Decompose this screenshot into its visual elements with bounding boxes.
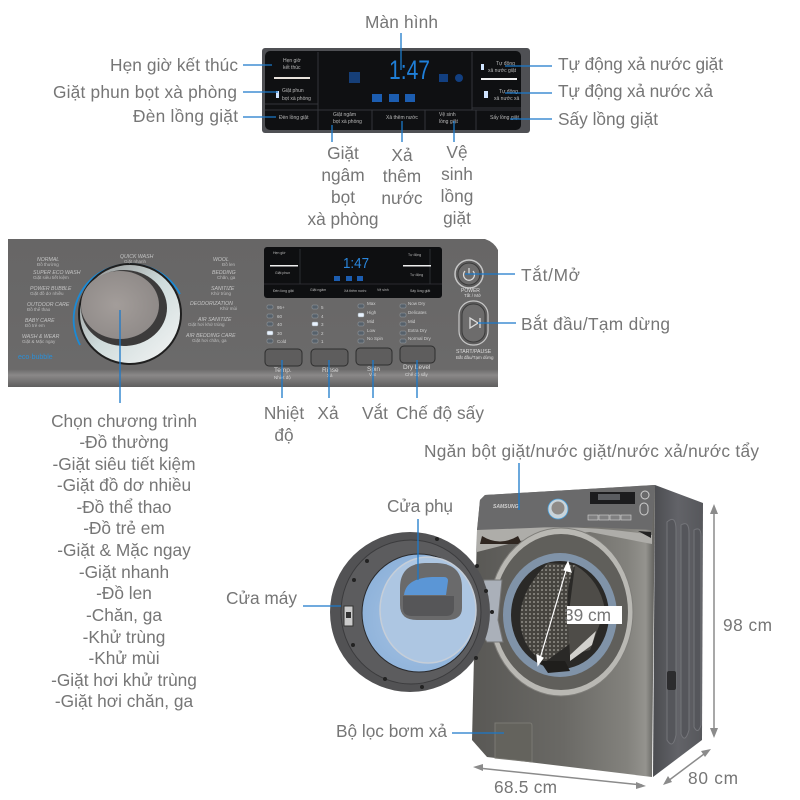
callout: auto detergent: Tự động xả nước giặt bbox=[558, 54, 723, 74]
callout: program list: Chọn chương trình bbox=[51, 411, 197, 431]
text: program names: Giặt & Mặc ngay bbox=[22, 339, 56, 344]
indicators: setting lists: 95+ bbox=[277, 305, 285, 310]
text: program names: BEDDING bbox=[212, 270, 236, 276]
indicators: setting lists bbox=[267, 301, 432, 344]
hinge bbox=[481, 580, 503, 642]
callout: drum clean: lồng bbox=[441, 186, 473, 206]
text: button labels bbox=[274, 364, 431, 380]
text: program names: AIR SANITIZE bbox=[197, 317, 232, 323]
callout: machine door bbox=[226, 588, 341, 608]
callout: screen bbox=[365, 12, 438, 70]
text: panel button labels: lồng giặt bbox=[439, 119, 459, 125]
door bbox=[330, 532, 494, 692]
panel: mini display: Giặt phun bbox=[275, 271, 290, 275]
callout: program list: -Đồ trẻ em bbox=[83, 518, 165, 538]
indicators: setting lists: 60 bbox=[277, 314, 283, 319]
door opening and drum bbox=[489, 528, 633, 696]
dial: program selector bbox=[74, 263, 182, 365]
indicators: setting lists: Normal Dry bbox=[408, 336, 432, 341]
text: button labels: Nhiệt độ bbox=[274, 375, 291, 380]
callout: temperature: Nhiệt bbox=[264, 403, 304, 423]
panel: mini display: Vệ sinh bbox=[377, 288, 389, 292]
text: program names: Khử trùng bbox=[211, 290, 232, 296]
text: program names bbox=[22, 254, 237, 344]
text: panel button labels: Tự động bbox=[496, 61, 515, 67]
text: program names: Đồ trẻ em bbox=[25, 323, 45, 328]
machine front bbox=[472, 485, 655, 777]
callout: temperature: độ bbox=[274, 425, 294, 445]
panel: mini display: Tự động bbox=[408, 253, 421, 257]
panel: middle control strip bbox=[8, 239, 498, 387]
indicators: setting lists: High bbox=[367, 310, 377, 315]
callout: foam soak bbox=[307, 125, 379, 229]
label: 98 cm: 98 cm bbox=[723, 615, 772, 635]
control panel top bbox=[477, 485, 655, 552]
button: start pause: Bắt đầu/Tạm dừng bbox=[456, 354, 494, 360]
text: program names: DEODORIZATION bbox=[190, 301, 233, 307]
callout: dispenser: Ngăn bột giặt/nước giặt/nước xả/nước tẩy bbox=[424, 441, 759, 461]
text: program names: WASH & WEAR bbox=[22, 334, 60, 340]
indicators: setting lists: 2 bbox=[321, 331, 324, 336]
callout: program list: -Đồ thể thao bbox=[76, 497, 172, 517]
callout: foam soak: bọt bbox=[331, 187, 355, 207]
text: program names: WOOL bbox=[213, 257, 229, 263]
callout: program list: -Giặt hơi chăn, ga bbox=[55, 691, 193, 711]
dimension: height bbox=[710, 504, 718, 738]
callout: program list: -Giặt & Mặc ngay bbox=[57, 540, 191, 560]
callout: foam soak: ngâm bbox=[321, 165, 365, 185]
callout: rinse bbox=[317, 360, 339, 423]
control panel top: SAMSUNG bbox=[493, 504, 519, 510]
callout: extra rinse: thêm bbox=[383, 166, 421, 186]
icons: display indicators bbox=[276, 64, 488, 102]
text: button labels: Temp. bbox=[274, 367, 292, 374]
text: program names: AIR BEDDING CARE bbox=[185, 333, 236, 339]
panel: mini display: Sấy lồng giặt bbox=[410, 289, 430, 293]
door handle bbox=[400, 563, 462, 620]
text: panel button labels: Đèn lồng giặt bbox=[279, 115, 309, 121]
indicators: setting lists: 4 bbox=[321, 314, 324, 319]
panel: mini display: Đèn lồng giặt bbox=[273, 289, 294, 293]
display: digital time: 1:47 bbox=[389, 55, 430, 85]
indicators: setting lists: Cold bbox=[277, 339, 287, 344]
label: 68.5 cm: 68.5 cm bbox=[494, 777, 557, 797]
text: button labels: Xả bbox=[327, 373, 333, 378]
callout: extra rinse: Xả bbox=[391, 145, 413, 165]
indicators: setting lists: 5 bbox=[321, 305, 324, 310]
text: program names: Đồ len bbox=[222, 262, 236, 267]
indicators: setting lists: Low bbox=[367, 328, 376, 333]
text: panel button labels bbox=[279, 58, 520, 125]
text: panel button labels: Giặt ngâm bbox=[333, 112, 356, 118]
button: start pause bbox=[456, 301, 494, 360]
callout: temperature bbox=[264, 360, 304, 445]
callout: pump filter: Bộ lọc bơm xả bbox=[336, 721, 447, 741]
text: program names: Chăn, ga bbox=[217, 275, 236, 280]
callout: rinse: Xả bbox=[317, 403, 339, 423]
text: program names: QUICK WASH bbox=[120, 254, 154, 260]
machine side panel bbox=[653, 485, 703, 777]
buttons: temp, rinse, spin, dry level bbox=[265, 346, 435, 366]
text: button labels: Spin bbox=[367, 366, 380, 373]
button: start pause: START/PAUSE bbox=[456, 349, 492, 355]
callout: drum clean: giặt bbox=[443, 208, 471, 228]
callout: program list: -Chăn, ga bbox=[86, 605, 162, 625]
callout: dry mode: Chế độ sấy bbox=[396, 403, 484, 423]
text: program names: Giặt đồ dơ nhiều bbox=[30, 291, 64, 296]
callout: drum clean bbox=[441, 121, 473, 228]
text: button labels: Chế độ sấy bbox=[405, 372, 429, 377]
indicators: setting lists: 40 bbox=[277, 322, 283, 327]
panel: mini display: Hẹn giờ bbox=[273, 251, 286, 255]
text: panel button labels: Xả thêm nước bbox=[386, 115, 418, 121]
indicators: setting lists: Mid bbox=[367, 319, 375, 324]
text: program names: POWER BUBBLE bbox=[30, 286, 72, 292]
callout: program list bbox=[51, 310, 197, 711]
panel: mini display: Giặt ngâm bbox=[310, 288, 326, 292]
indicators: setting lists: 3 bbox=[321, 322, 324, 327]
panel: mini display: Xả thêm nước bbox=[344, 289, 367, 293]
text: program names: NORMAL bbox=[37, 257, 59, 263]
indicators: setting lists: No Spin bbox=[367, 336, 384, 341]
text: program names: OUTDOOR CARE bbox=[27, 302, 70, 308]
text: program names: Giặt hơi chăn, ga bbox=[192, 338, 227, 343]
text: program names: Khử mùi bbox=[220, 305, 237, 311]
text: program names: SANITIZE bbox=[211, 286, 235, 292]
callout: end timer: Hẹn giờ kết thúc bbox=[110, 55, 238, 75]
dimension: depth bbox=[663, 749, 711, 785]
callout: add door bbox=[387, 496, 453, 580]
indicators: setting lists: Delicates bbox=[408, 310, 427, 315]
text: panel button labels: Sấy lồng giặt bbox=[490, 115, 520, 121]
indicators: setting lists: 1 bbox=[321, 339, 324, 344]
callout: spin bbox=[362, 360, 388, 423]
filter cover bbox=[495, 723, 532, 762]
button: power bbox=[455, 260, 483, 298]
callout: program list: -Giặt hơi khử trùng bbox=[51, 670, 197, 690]
callout: power bbox=[465, 265, 580, 285]
callout: power: Tắt/Mở bbox=[521, 265, 580, 285]
text: button labels: Vắt bbox=[369, 371, 377, 377]
callout: screen: Màn hình bbox=[365, 12, 438, 32]
text: program names: Giặt nhanh bbox=[124, 259, 147, 264]
callout: program list: -Giặt siêu tiết kiệm bbox=[52, 454, 196, 474]
button: power: POWER bbox=[461, 288, 480, 294]
text: panel button labels: Hẹn giờ bbox=[283, 58, 301, 64]
callout: program list: -Khử trùng bbox=[83, 627, 165, 647]
dimension: width bbox=[473, 764, 646, 789]
inner blue window bbox=[404, 577, 448, 595]
callout: foam spray: Giặt phun bọt xà phòng bbox=[53, 82, 237, 102]
callout: drum clean: Vệ bbox=[446, 142, 468, 162]
callout: extra rinse: nước bbox=[381, 188, 423, 208]
washing machine bbox=[472, 485, 703, 777]
callout: program list: -Đồ len bbox=[96, 583, 152, 603]
text: program names: SUPER ECO WASH bbox=[33, 270, 81, 276]
panel: mini display: Tự động bbox=[410, 273, 423, 277]
text: program names: BABY CARE bbox=[25, 318, 55, 324]
callout: foam soak: xà phòng bbox=[307, 209, 379, 229]
panel: mini display bbox=[264, 247, 442, 298]
callout: auto softener: Tự động xả nước xả bbox=[558, 81, 713, 101]
callout: start pause: Bắt đầu/Tạm dừng bbox=[521, 314, 670, 334]
callout: add door: Cửa phụ bbox=[387, 496, 453, 516]
indicators: setting lists: Mid bbox=[408, 319, 416, 324]
text: program names: Đồ thường bbox=[37, 262, 59, 267]
callout: program list: -Giặt nhanh bbox=[79, 562, 169, 582]
logo: ecobubble: eco·bubble bbox=[18, 354, 53, 361]
callout: machine door: Cửa máy bbox=[226, 588, 297, 608]
callout: extra rinse bbox=[381, 121, 423, 208]
callout: dry mode bbox=[396, 360, 484, 423]
callout: program list: -Khử mùi bbox=[88, 648, 160, 668]
arrow: drum diameter bbox=[537, 562, 571, 665]
text: panel button labels: Tự động bbox=[499, 89, 518, 95]
text: panel button labels: bọt xà phòng bbox=[333, 119, 362, 125]
text: panel button labels: bọt xà phòng bbox=[282, 96, 311, 102]
callout: drum dry: Sấy lồng giặt bbox=[558, 109, 658, 129]
callout: foam soak: Giặt bbox=[327, 143, 359, 163]
callout: drum clean: sinh bbox=[441, 164, 473, 184]
text: panel button labels: Vệ sinh bbox=[439, 112, 456, 118]
callout: drum light: Đèn lồng giặt bbox=[133, 106, 238, 126]
label: 80 cm: 80 cm bbox=[688, 768, 738, 788]
callout: program list: -Đồ thường bbox=[79, 432, 169, 452]
indicators: setting lists: Extra Dry bbox=[408, 328, 428, 333]
callout: program list: -Giặt đồ dơ nhiều bbox=[57, 475, 191, 495]
button: power: Tắt / Mở bbox=[464, 292, 481, 298]
text: program names: Giặt hơi khử trùng bbox=[188, 321, 225, 327]
indicators: setting lists: 30 bbox=[277, 331, 283, 336]
text: button labels: Dry Level bbox=[403, 364, 431, 371]
text: panel button labels: Giặt phun bbox=[282, 88, 304, 94]
text: panel button labels: xả nước giặt bbox=[488, 68, 517, 74]
label: 39 cm: 39 cm bbox=[564, 605, 611, 625]
text: button labels: Rinse bbox=[322, 367, 339, 374]
indicators: setting lists: Max bbox=[367, 301, 376, 306]
text: program names: Đồ thể thao bbox=[27, 306, 51, 312]
text: panel button labels: kết thúc bbox=[283, 65, 301, 71]
indicators: setting lists: Now Dry bbox=[408, 301, 426, 306]
panel: mini display: 1:47 bbox=[343, 255, 369, 272]
text: program names: Giặt siêu tiết kiệm bbox=[33, 275, 69, 280]
text: panel button labels: xả nước xả bbox=[494, 96, 519, 102]
panel: top control panel bbox=[262, 48, 530, 133]
callout: spin: Vắt bbox=[362, 403, 388, 423]
